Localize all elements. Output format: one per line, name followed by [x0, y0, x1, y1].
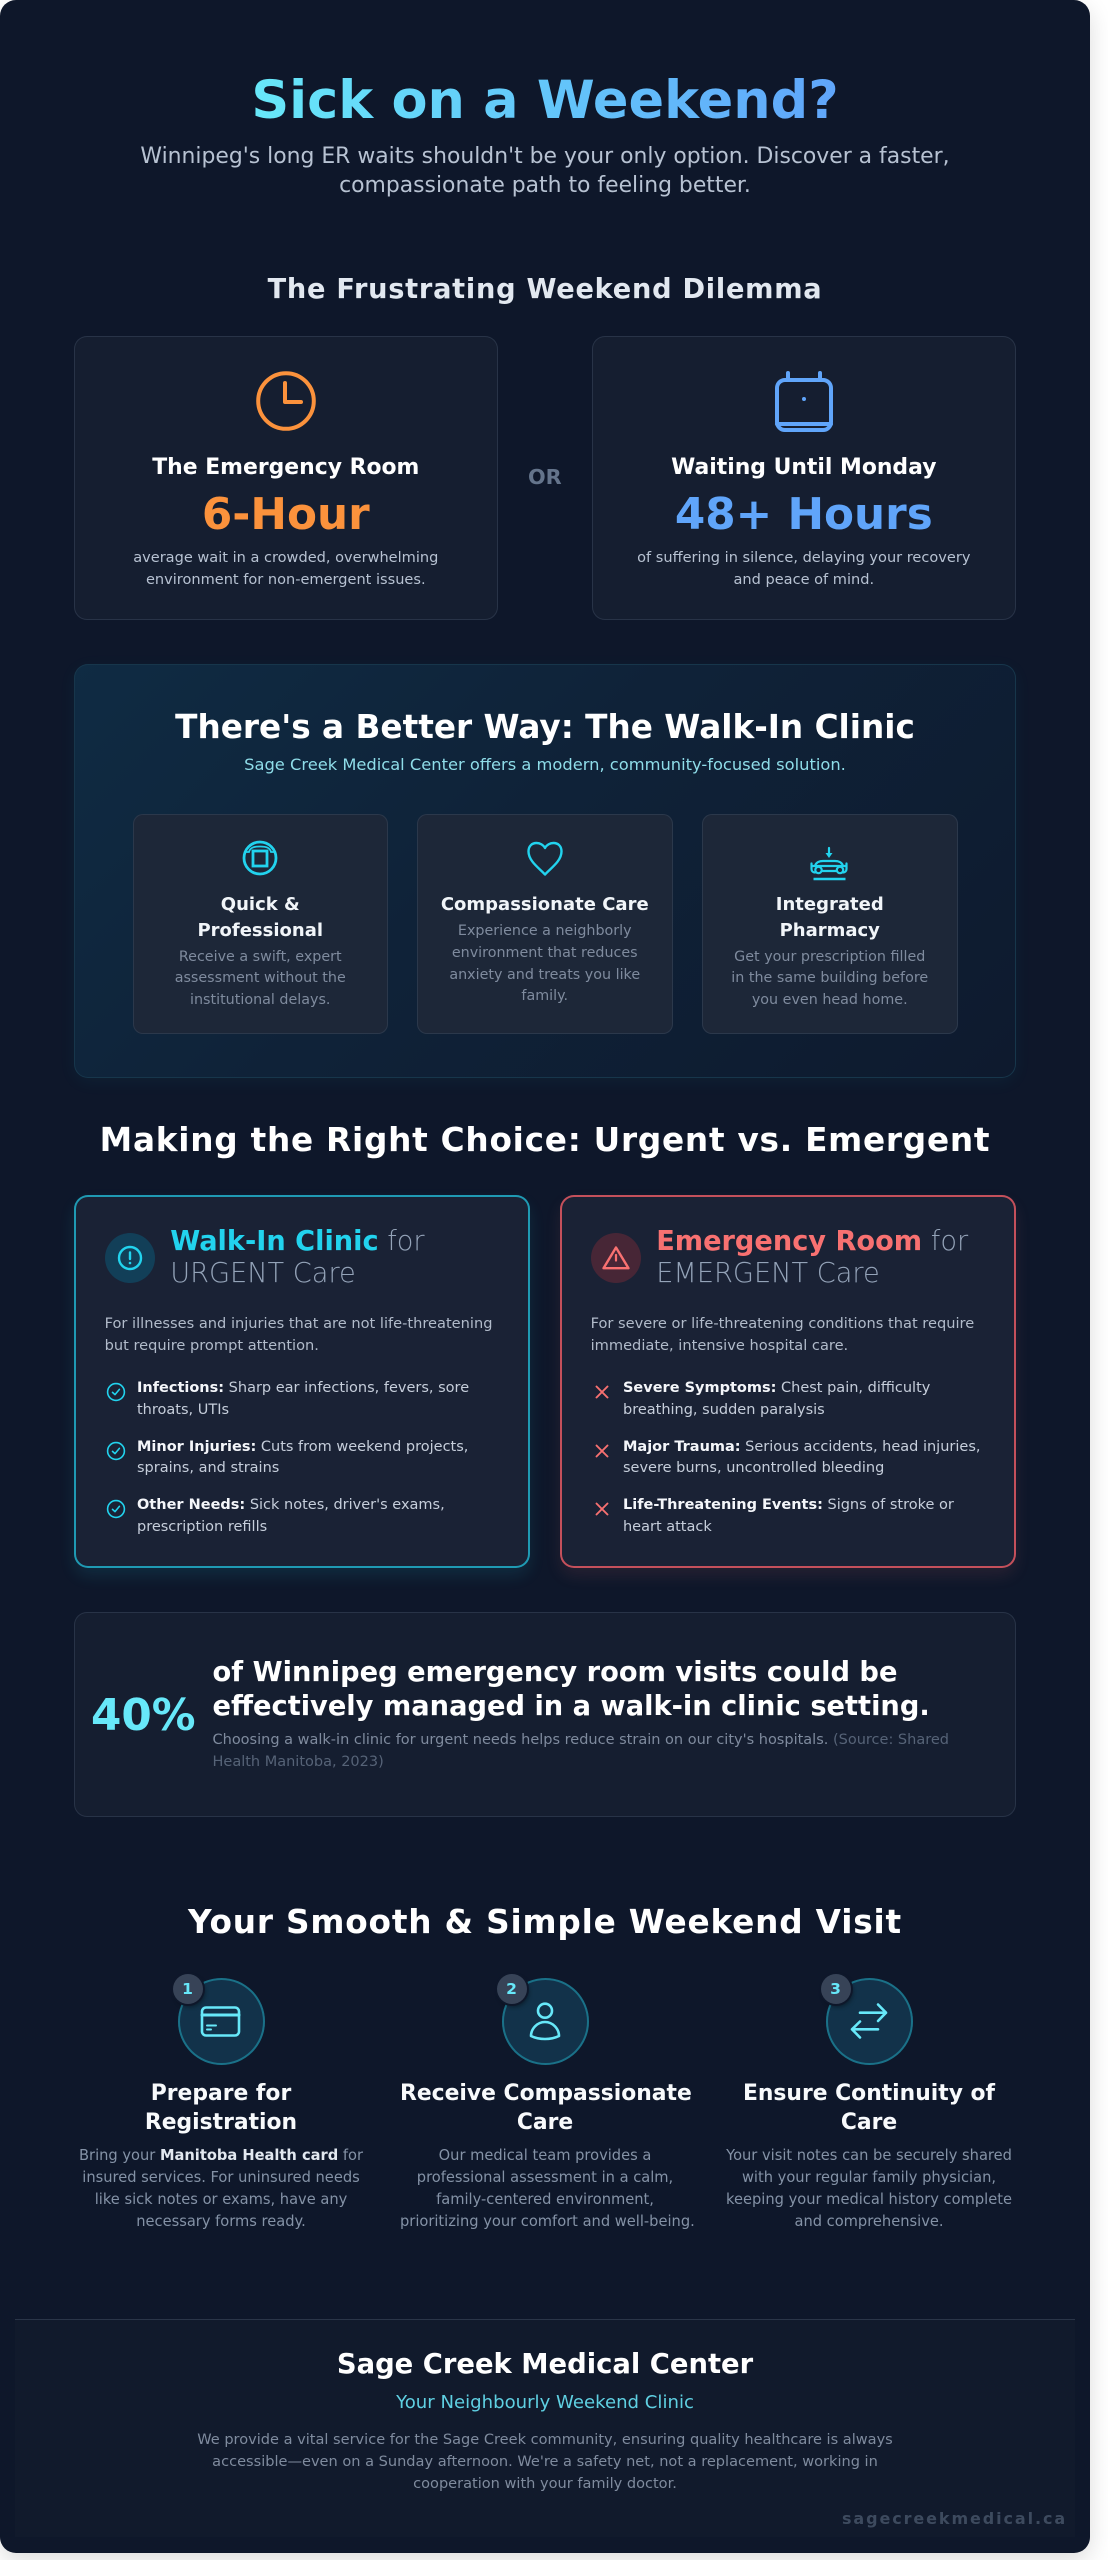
list item: other needs: [106, 1497, 445, 1535]
subtitle: [140, 144, 950, 198]
feature text: assessment without the: [175, 970, 346, 986]
icon: exchange arrows: [826, 1978, 912, 2064]
item text: Other Needs: Sick notes, driver's exams,: [137, 1497, 445, 1513]
list item: major trauma: [596, 1438, 980, 1476]
panel description: immediate, intensive hospital care.: [591, 1337, 848, 1354]
feature title: Pharmacy: [780, 920, 880, 941]
feature text: Receive a swift, expert: [179, 949, 342, 965]
feature title: Integrated: [776, 894, 884, 915]
step number: [820, 1974, 850, 2004]
icon: cross: [596, 1502, 608, 1516]
step text: professional assessment in a calm,: [417, 2169, 673, 2186]
stat: 40%: 40%: [91, 1690, 196, 1741]
step text: [724, 2145, 1014, 2233]
feature text: [731, 949, 928, 1008]
step text: like sick notes or exams, have any: [95, 2191, 347, 2208]
step 2: receive compassionate care: [400, 1974, 690, 2244]
feature card: quick and professional: [132, 814, 388, 1034]
item text: sprains, and strains: [137, 1460, 279, 1476]
heading: weekend visit: Your Smooth & Simple Weekend Visit: [188, 1903, 902, 1941]
item text: heart attack: [623, 1519, 712, 1535]
panel heading: [656, 1226, 968, 1289]
title: Sick on a Weekend?: [251, 70, 839, 131]
arrows glyph: [826, 1978, 912, 2064]
footer text: We provide a vital service for the Sage Creek community, ensuring quality healthcare is always: [197, 2431, 893, 2448]
feature text: environment that reduces: [452, 945, 638, 961]
icon: warning triangle: [591, 1233, 641, 1283]
item text: Severe Symptoms: Chest pain, difficulty: [623, 1380, 930, 1396]
stat heading: effectively managed in a walk-in clinic setting.: [212, 1691, 930, 1722]
item text: [623, 1438, 980, 1476]
icon: id card: [178, 1978, 264, 2064]
feature title: [776, 894, 884, 941]
stat heading: [212, 1657, 930, 1722]
footer text: cooperation with your family doctor.: [413, 2475, 677, 2492]
step number: 2: [506, 1980, 517, 1998]
feature text: family.: [521, 988, 568, 1004]
list item: severe symptoms: [596, 1380, 930, 1418]
list item: minor injuries: [106, 1438, 468, 1476]
panel: waiting until monday: [592, 336, 1016, 620]
feature card: integrated pharmacy: [702, 814, 958, 1034]
step text: [76, 2145, 366, 2233]
icon: check: [106, 1442, 126, 1460]
step number: [172, 1974, 202, 2004]
panel heading: EMERGENT Care: [656, 1258, 880, 1289]
step text: [400, 2145, 690, 2233]
heading: There's a Better Way: The Walk-In Clinic: [175, 708, 915, 746]
step title: Ensure Continuity of: [743, 2081, 995, 2106]
panel description: [105, 1315, 492, 1354]
subtitle: compassionate path to feeling better.: [339, 173, 751, 198]
heading: dilemma: The Frustrating Weekend Dilemma: [268, 274, 822, 305]
icon: pharmacy: [810, 846, 848, 880]
step title: Registration: [145, 2110, 297, 2135]
feature card: compassionate care: [417, 814, 672, 1034]
footer tagline: Your Neighbourly Weekend Clinic: [396, 2392, 694, 2413]
panel heading: Walk-In Clinic for: [170, 1226, 425, 1257]
step text: keeping your medical history complete: [726, 2191, 1012, 2208]
step title: Care: [841, 2110, 897, 2135]
panel description: [591, 1315, 974, 1354]
card description: environment for non-emergent issues.: [146, 571, 426, 588]
step text: Our medical team provides a: [439, 2147, 651, 2164]
feature title: Compassionate Care: [441, 894, 649, 915]
panel description: For severe or life-threatening conditions that require: [591, 1315, 974, 1332]
step text: Bring your Manitoba Health card for: [79, 2147, 363, 2164]
icon: quick: [242, 840, 278, 876]
item text: [137, 1438, 468, 1476]
card heading: The Emergency Room: [152, 455, 419, 480]
stat note: Choosing a walk-in clinic for urgent needs helps reduce strain on our city's hospitals. (Source: Shared: [212, 1732, 949, 1748]
footer title: Sage Creek Medical Center: [337, 2349, 753, 2380]
stat heading: of Winnipeg emergency room visits could be: [212, 1657, 897, 1688]
item text: Major Trauma: Serious accidents, head injuries,: [623, 1438, 980, 1454]
step title: [400, 2079, 690, 2137]
panel: better way: [74, 664, 1016, 1078]
card description: average wait in a crowded, overwhelming: [133, 549, 438, 566]
item text: [623, 1497, 954, 1535]
item text: [137, 1380, 469, 1418]
feature text: anxiety and treats you like: [449, 967, 640, 983]
card description: [637, 549, 970, 588]
list item: life-threatening events: [596, 1497, 954, 1535]
step text: family-centered environment,: [436, 2191, 654, 2208]
step 1: prepare for registration: [76, 1974, 366, 2244]
icon: clock: [256, 371, 316, 431]
item text: breathing, sudden paralysis: [623, 1402, 825, 1418]
step title: Prepare for: [151, 2081, 291, 2106]
panel: emergency room emergent care: [560, 1195, 1016, 1568]
step title: Receive Compassionate: [400, 2081, 692, 2106]
step number: 3: [830, 1980, 841, 1998]
website address: sagecreekmedical.ca: [842, 2509, 1067, 2528]
icon: calendar: [775, 371, 833, 432]
step number: 1: [182, 1980, 193, 1998]
step text: insured services. For uninsured needs: [82, 2169, 360, 2186]
step text: and comprehensive.: [794, 2213, 944, 2230]
panel description: but require prompt attention.: [105, 1337, 319, 1354]
panel heading: URGENT Care: [170, 1258, 356, 1289]
step text: Your visit notes can be securely shared: [726, 2147, 1012, 2164]
card description: and peace of mind.: [733, 571, 874, 588]
step title: [724, 2079, 1014, 2137]
icon: check: [106, 1500, 126, 1518]
list item: infections: [106, 1380, 469, 1418]
feature title: Professional: [197, 920, 323, 941]
step title: [76, 2079, 366, 2137]
card glyph: [178, 1978, 264, 2064]
item text: Minor Injuries: Cuts from weekend projects,: [137, 1438, 468, 1454]
item text: throats, UTIs: [137, 1402, 229, 1418]
footer: [15, 2319, 1075, 2537]
item text: Life-Threatening Events: Signs of stroke or: [623, 1497, 954, 1513]
feature text: institutional delays.: [190, 992, 330, 1008]
feature text: Experience a neighborly: [458, 923, 632, 939]
panel: emergency room wait: [74, 336, 498, 620]
feature text: Get your prescription filled: [734, 949, 925, 965]
step text: with your regular family physician,: [742, 2169, 996, 2186]
step text: necessary forms ready.: [136, 2213, 306, 2230]
feature title: [197, 894, 323, 941]
feature text: you even head home.: [752, 992, 908, 1008]
feature title: Quick &: [221, 894, 300, 915]
step text: prioritizing your comfort and well-being.: [400, 2213, 695, 2230]
card description: of suffering in silence, delaying your recovery: [637, 549, 970, 566]
label: or: OR: [528, 465, 562, 489]
step number: [496, 1974, 526, 2004]
item text: Infections: Sharp ear infections, fevers, sore: [137, 1380, 469, 1396]
panel: 40 percent statistic: [74, 1612, 1016, 1817]
person glyph: [502, 1978, 588, 2064]
footer text: accessible—even on a Sunday afternoon. We're a safety net, not a replacement, working in: [212, 2453, 878, 2470]
item text: [623, 1380, 930, 1418]
stat note: [212, 1732, 949, 1770]
icon: cross: [596, 1444, 608, 1458]
item text: [137, 1497, 445, 1535]
step 3: ensure continuity of care: [724, 1974, 1014, 2244]
icon: alert circle: [105, 1233, 155, 1283]
icon: check: [106, 1382, 126, 1402]
item text: prescription refills: [137, 1519, 267, 1535]
subheading: Sage Creek Medical Center offers a modern, community-focused solution.: [244, 755, 846, 774]
card heading: Waiting Until Monday: [671, 455, 936, 480]
item text: severe burns, uncontrolled bleeding: [623, 1460, 884, 1476]
heading: right choice: Making the Right Choice: Urgent vs. Emergent: [100, 1120, 990, 1158]
panel heading: [170, 1226, 425, 1289]
feature text: in the same building before: [731, 970, 928, 986]
icon: person: [502, 1978, 588, 2064]
feature text: [449, 923, 640, 1004]
icon: heart: [527, 842, 563, 876]
feature text: [175, 949, 346, 1008]
subtitle: Winnipeg's long ER waits shouldn't be your only option. Discover a faster,: [140, 144, 950, 169]
stat note: Health Manitoba, 2023): [212, 1754, 384, 1770]
panel description: For illnesses and injuries that are not life-threatening: [105, 1315, 492, 1332]
stat: 6-hour: 6-Hour: [202, 489, 370, 540]
panel heading: Emergency Room for: [656, 1226, 968, 1257]
step title: Care: [517, 2110, 573, 2135]
stat: 48+ hours: 48+ Hours: [675, 489, 933, 540]
footer text: [15, 2429, 1075, 2494]
card description: [133, 549, 438, 588]
icon: cross: [596, 1386, 608, 1398]
panel: walk-in clinic urgent care: [74, 1195, 530, 1568]
